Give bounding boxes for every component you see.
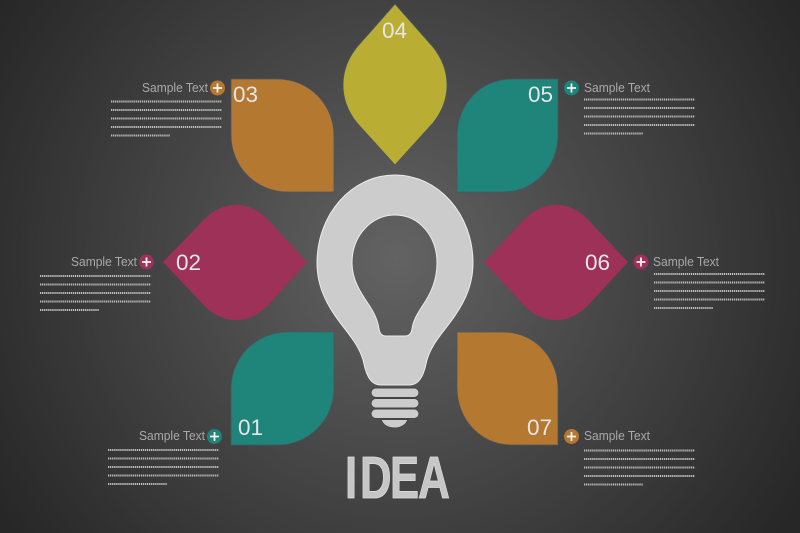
callout 02 bbox=[40, 254, 154, 310]
petal 07: 07 bbox=[527, 415, 552, 440]
callout 03: Sample Text bbox=[142, 80, 208, 95]
callout 05: Sample Text bbox=[584, 80, 650, 95]
petal 06: 06 bbox=[585, 250, 610, 275]
title: D bbox=[360, 445, 392, 511]
callout 06: Sample Text bbox=[653, 254, 719, 269]
icon: light bulb bbox=[317, 175, 473, 428]
title bbox=[345, 445, 450, 512]
petal 04: 04 bbox=[382, 18, 407, 43]
petal 03 bbox=[231, 79, 334, 192]
petal 06 bbox=[484, 205, 628, 320]
petal 03: 03 bbox=[233, 82, 258, 107]
petal 01 bbox=[231, 332, 334, 445]
petal 02 bbox=[163, 205, 307, 320]
petal 02: 02 bbox=[176, 250, 201, 275]
callout 07 bbox=[564, 428, 695, 484]
callout 01 bbox=[108, 428, 222, 484]
petal 07 bbox=[457, 332, 558, 445]
callout 03 bbox=[111, 80, 225, 136]
petal 04 bbox=[343, 4, 447, 165]
callout 05 bbox=[564, 80, 695, 134]
callout 02: Sample Text bbox=[71, 254, 137, 269]
bulb screw base bbox=[371, 388, 419, 428]
callout 06 bbox=[634, 254, 765, 308]
petal 05: 05 bbox=[528, 82, 553, 107]
callout 07: Sample Text bbox=[584, 428, 650, 443]
bulb glass bbox=[317, 175, 473, 385]
title: I bbox=[345, 445, 357, 511]
callout 01: Sample Text bbox=[139, 428, 205, 443]
title: A bbox=[418, 446, 450, 512]
petal 05 bbox=[457, 79, 558, 192]
title: E bbox=[390, 445, 419, 511]
petal 01: 01 bbox=[238, 415, 263, 440]
